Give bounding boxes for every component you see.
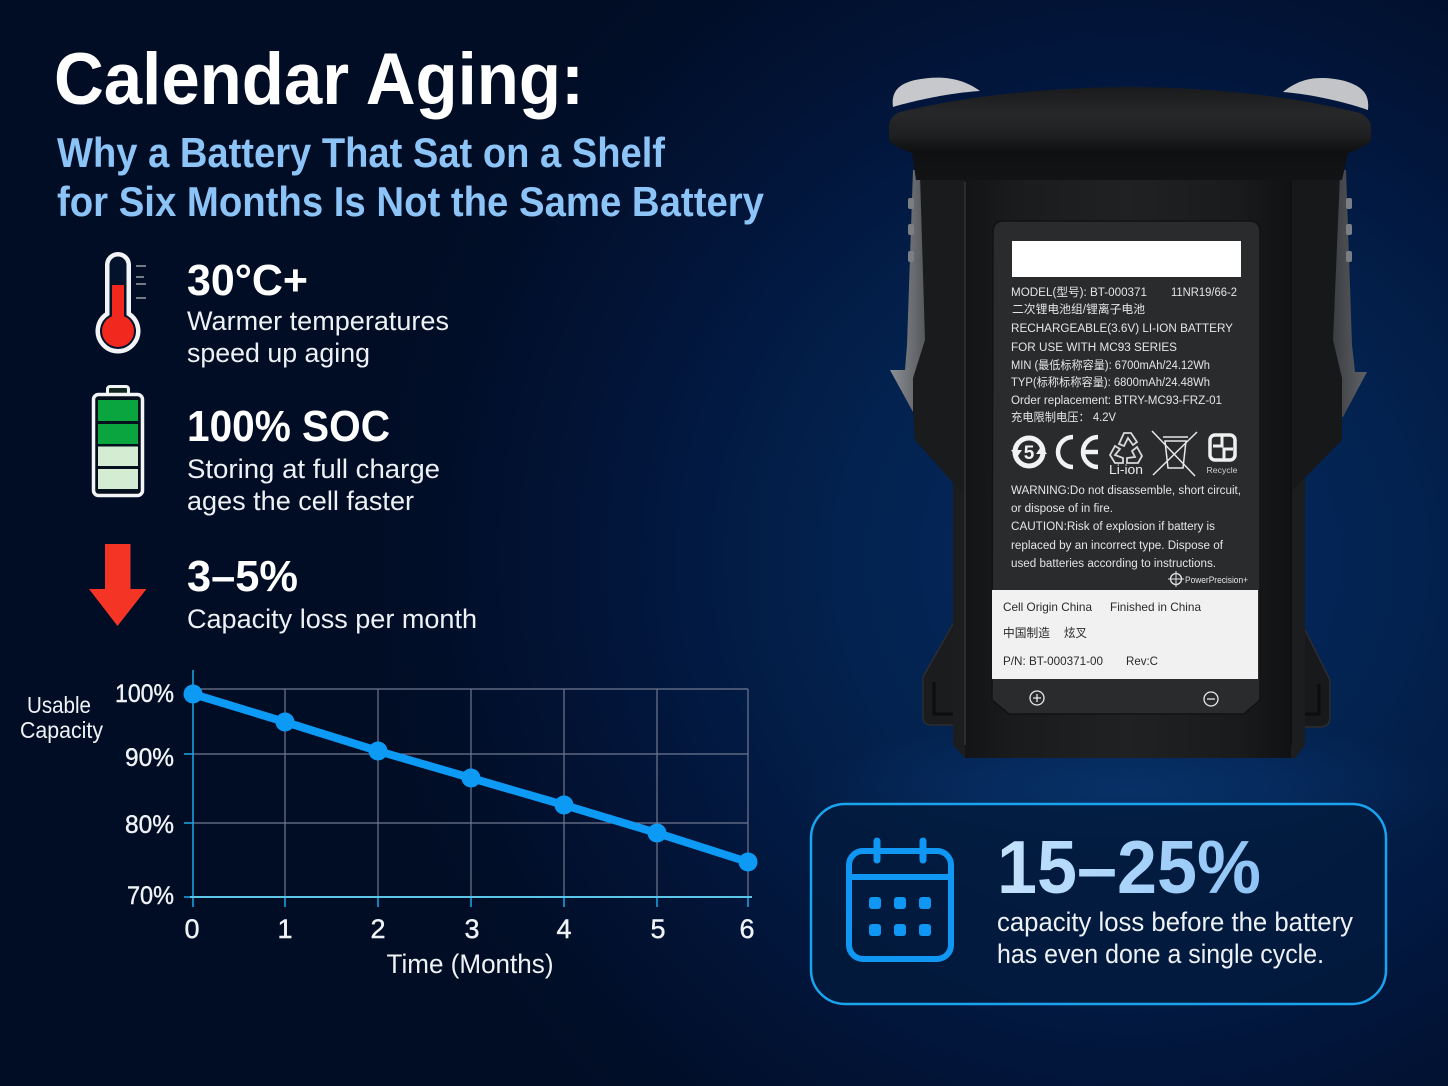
white origin label: P/N: BT-000371-00 bbox=[1003, 654, 1103, 668]
callout text: capacity loss before the battery bbox=[997, 907, 1353, 937]
x axis labels bbox=[184, 914, 755, 944]
grey latch buttons bbox=[893, 78, 980, 107]
y axis labels bbox=[115, 680, 174, 910]
label text: 11NR19/66-2 bbox=[1171, 287, 1237, 299]
battery photo bbox=[889, 78, 1371, 758]
PowerPrecision logo bbox=[1168, 571, 1248, 587]
label text: FOR USE WITH MC93 SERIES bbox=[1011, 342, 1177, 354]
x axis labels: 0 bbox=[184, 914, 200, 944]
title: Calendar Aging: bbox=[54, 39, 584, 120]
top cap bbox=[889, 87, 1371, 180]
white origin label bbox=[992, 590, 1258, 679]
y axis labels: 90% bbox=[125, 744, 174, 772]
icon: calendar bbox=[849, 841, 951, 959]
label text: RECHARGEABLE(3.6V) LI-ION BATTERY bbox=[1011, 323, 1233, 335]
stat: temperature: speed up aging bbox=[187, 338, 370, 368]
stat: temperature: Warmer temperatures bbox=[187, 306, 449, 336]
x axis labels: 6 bbox=[739, 914, 755, 944]
x axis labels: 2 bbox=[370, 914, 386, 944]
label text: TYP(标称标称容量): 6800mAh/24.48Wh bbox=[1011, 375, 1210, 389]
mounting clips bbox=[923, 612, 1330, 727]
label text bbox=[1011, 285, 1237, 424]
label text: Order replacement: BTRY-MC93-FRZ-01 bbox=[1011, 395, 1222, 407]
label text: 充电限制电压： 4.2V bbox=[1011, 410, 1116, 424]
icon: positive terminal bbox=[1030, 691, 1044, 705]
y axis labels: 80% bbox=[125, 811, 174, 839]
icon: down arrow bbox=[89, 544, 146, 626]
x axis labels: 1 bbox=[277, 914, 293, 944]
label text: MIN (最低标称容量): 6700mAh/24.12Wh bbox=[1011, 358, 1210, 372]
icon: 5 year mark bbox=[1011, 438, 1047, 466]
stat: capacity loss: Capacity loss per month bbox=[187, 604, 477, 634]
subtitle: for Six Months Is Not the Same Battery bbox=[57, 178, 765, 225]
white origin label: 中国制造 bbox=[1003, 625, 1050, 640]
stat: state of charge bbox=[187, 402, 440, 516]
label panel bbox=[992, 221, 1260, 714]
x axis labels: 3 bbox=[464, 914, 480, 944]
label text: MODEL(型号): BT-000371 bbox=[1011, 285, 1147, 299]
subtitle: Why a Battery That Sat on a Shelf bbox=[57, 129, 666, 176]
stat: state of charge: Storing at full charge bbox=[187, 454, 440, 484]
line chart: usable capacity over time bbox=[20, 670, 758, 979]
warning text: WARNING:Do not disassemble, short circuit, bbox=[1011, 485, 1241, 497]
warning text bbox=[1011, 485, 1241, 570]
y axis labels: 70% bbox=[127, 882, 174, 910]
callout: total capacity loss bbox=[811, 804, 1386, 1004]
warning text: used batteries according to instructions. bbox=[1011, 558, 1216, 570]
x axis labels: 4 bbox=[556, 914, 572, 944]
stat: temperature: 30°C+ bbox=[187, 256, 308, 305]
white barcode strip bbox=[1012, 241, 1241, 277]
warning text: replaced by an incorrect type. Dispose of bbox=[1011, 540, 1224, 552]
centre face bbox=[965, 178, 1291, 758]
side panels bbox=[913, 175, 975, 493]
y axis title: Capacity bbox=[20, 717, 103, 743]
warning text: CAUTION:Risk of explosion if battery is bbox=[1011, 521, 1215, 533]
compliance icons bbox=[1011, 431, 1238, 477]
stat: capacity loss: 3–5% bbox=[187, 552, 298, 601]
stat: capacity loss bbox=[187, 552, 477, 634]
y axis title bbox=[20, 692, 103, 743]
icon: Li-ion recycling: Li-ion bbox=[1109, 463, 1143, 477]
grey side grips bbox=[890, 170, 1367, 417]
icon: CE mark bbox=[1058, 437, 1098, 467]
y axis title: Usable bbox=[27, 692, 91, 718]
white origin label: Cell Origin China bbox=[1003, 600, 1092, 614]
icon: recycle square: Recycle bbox=[1206, 466, 1238, 475]
warning text: or dispose of in fire. bbox=[1011, 503, 1113, 515]
icon: battery bbox=[94, 386, 142, 496]
icon: negative terminal bbox=[1204, 692, 1218, 706]
x axis title: Time (Months) bbox=[386, 949, 554, 979]
icon: recycle square bbox=[1206, 435, 1238, 475]
x axis labels: 5 bbox=[650, 914, 666, 944]
y axis labels: 100% bbox=[115, 680, 174, 708]
PowerPrecision logo: PowerPrecision+ bbox=[1185, 575, 1248, 585]
icon: thermometer bbox=[98, 254, 146, 351]
white origin label: 炫叉 bbox=[1064, 625, 1087, 640]
stat: temperature bbox=[187, 256, 449, 368]
callout: total capacity loss: has even done a single cycle. bbox=[997, 939, 1324, 969]
data line bbox=[184, 684, 758, 872]
stat: state of charge: ages the cell faster bbox=[187, 486, 414, 516]
icon: Li-ion recycling bbox=[1109, 433, 1143, 477]
icon: 5 year mark: 5 bbox=[1024, 443, 1035, 464]
big number: 15–25% bbox=[997, 825, 1261, 909]
subtitle bbox=[57, 129, 765, 225]
icon: crossed-out bin bbox=[1152, 431, 1197, 476]
main body bbox=[953, 470, 1305, 758]
white origin label: Rev:C bbox=[1126, 654, 1158, 668]
label text: 二次锂电池组/锂离子电池 bbox=[1012, 302, 1146, 316]
stat: state of charge: 100% SOC bbox=[187, 402, 390, 451]
white origin label: Finished in China bbox=[1110, 600, 1201, 614]
